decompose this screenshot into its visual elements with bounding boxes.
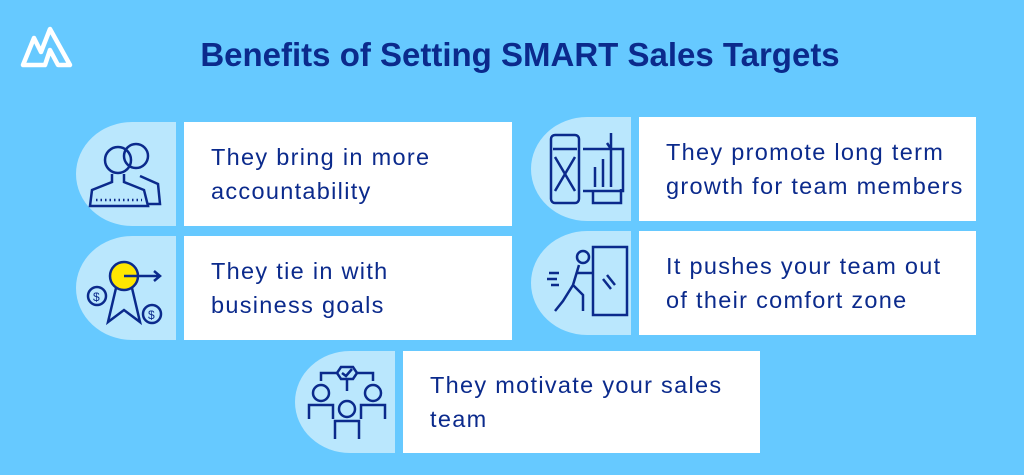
icon: people	[76, 122, 176, 226]
card: accountability: accountability	[211, 178, 372, 204]
icon: hourglass chart	[531, 117, 631, 221]
card: accountability: They bring in more	[211, 144, 430, 170]
title: Benefits of Setting SMART Sales Targets	[200, 36, 840, 73]
card: business goals: They tie in with	[211, 258, 389, 284]
card: motivate: They motivate your sales	[430, 372, 722, 398]
card: motivate: team	[430, 406, 487, 432]
card: motivate	[295, 351, 760, 453]
card: accountability	[76, 122, 512, 226]
logo	[20, 26, 72, 68]
icon: target: $	[93, 290, 100, 304]
card: long term growth: They promote long term	[666, 139, 944, 165]
card: business goals	[76, 236, 512, 340]
card: long term growth: growth for team members	[666, 173, 964, 199]
icon: target	[76, 236, 176, 340]
card: comfort zone: It pushes your team out	[666, 253, 941, 279]
card: business goals: business goals	[211, 292, 385, 318]
card: comfort zone: of their comfort zone	[666, 287, 908, 313]
icon: target: $	[148, 308, 155, 322]
icon: pushing person	[531, 231, 631, 335]
card: comfort zone	[531, 231, 976, 335]
card: long term growth	[531, 117, 976, 221]
icon: team	[295, 351, 395, 453]
